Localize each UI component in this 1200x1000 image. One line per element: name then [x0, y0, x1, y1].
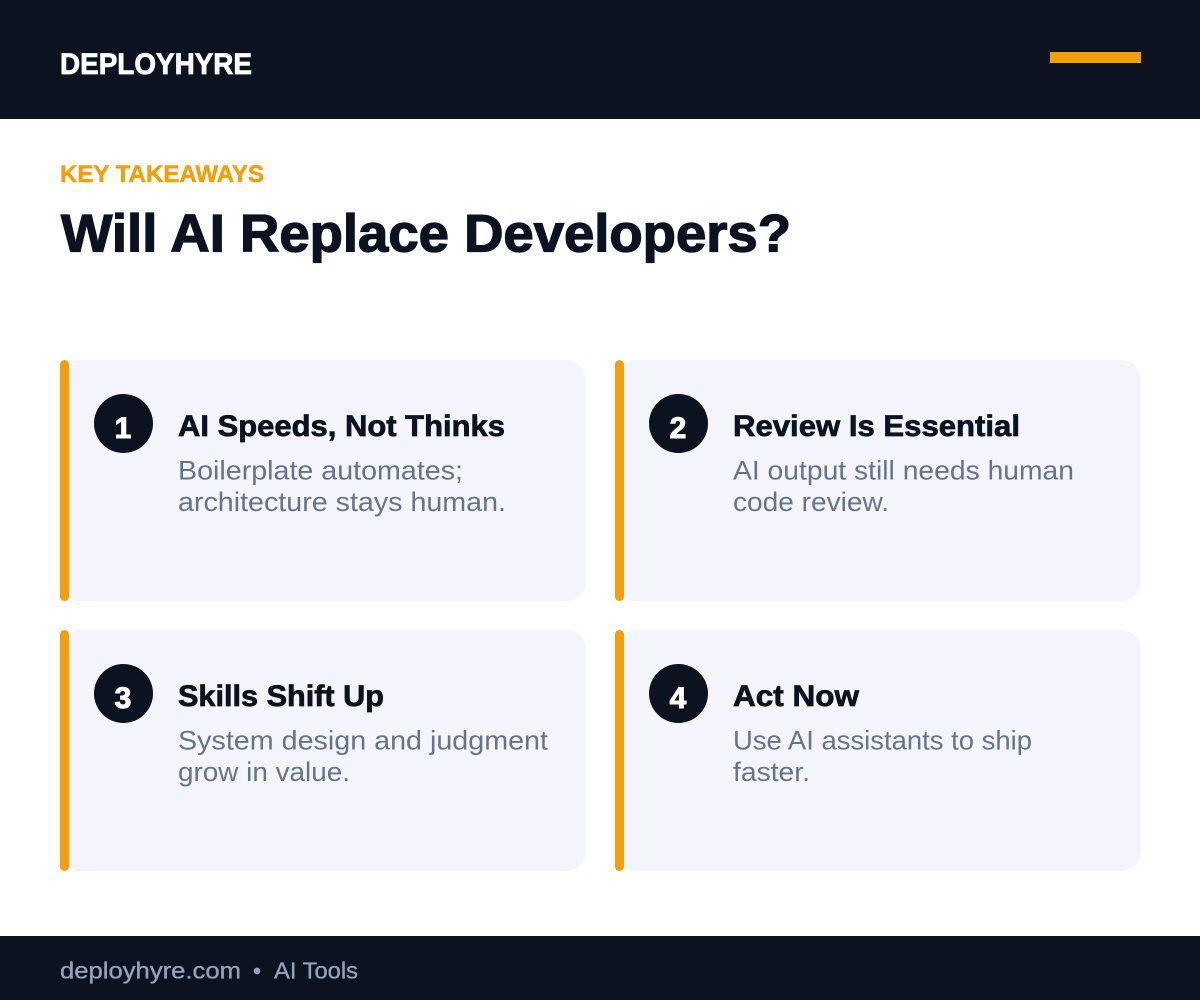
card 3 text: grow in value.	[178, 757, 350, 787]
card 4 text: Use AI assistants to ship	[733, 726, 1032, 756]
footer text	[60, 958, 358, 984]
card 3 text	[178, 726, 549, 787]
card 1 number	[94, 394, 153, 453]
card 3 heading: Skills Shift Up	[178, 680, 384, 713]
card 1 heading: AI Speeds, Not Thinks	[178, 410, 505, 443]
card 2 text: code review.	[733, 487, 889, 517]
card 3 number	[94, 664, 153, 723]
card 2 heading: Review Is Essential	[733, 410, 1020, 443]
card 1 text: Boilerplate automates;	[178, 456, 463, 486]
panel: card 1	[60, 360, 586, 601]
eyebrow label: KEY TAKEAWAYS	[60, 161, 264, 188]
card 4 text: faster.	[733, 757, 810, 787]
card 1 text: architecture stays human.	[178, 487, 506, 517]
card 4 text	[733, 726, 1032, 787]
card 2 number	[649, 394, 708, 453]
header accent bar	[1050, 52, 1141, 63]
card 4 number	[649, 664, 708, 723]
brand name: DEPLOYHYRE	[60, 48, 252, 81]
card 3 accent	[60, 630, 69, 871]
footer band	[0, 936, 1200, 1000]
card 1 accent	[60, 360, 69, 601]
header band	[0, 0, 1200, 119]
footer text: AI Tools	[274, 958, 358, 984]
card 4 number: 4	[670, 682, 687, 715]
panel: card 2	[615, 360, 1141, 601]
card 1 number: 1	[115, 412, 131, 445]
card 4 heading: Act Now	[733, 680, 859, 713]
panel: card 3	[60, 630, 586, 871]
card 1 text	[178, 456, 506, 517]
card 4 accent	[615, 630, 624, 871]
footer text: deployhyre.com	[60, 958, 241, 984]
card 2 text: AI output still needs human	[733, 456, 1074, 486]
card 3 text: System design and judgment	[178, 726, 549, 756]
card 3 number: 3	[115, 682, 131, 715]
card 2 text	[733, 456, 1074, 517]
panel: card 4	[615, 630, 1141, 871]
card 2 accent	[615, 360, 624, 601]
card 2 number: 2	[670, 412, 686, 445]
title: Will AI Replace Developers?	[61, 204, 791, 264]
